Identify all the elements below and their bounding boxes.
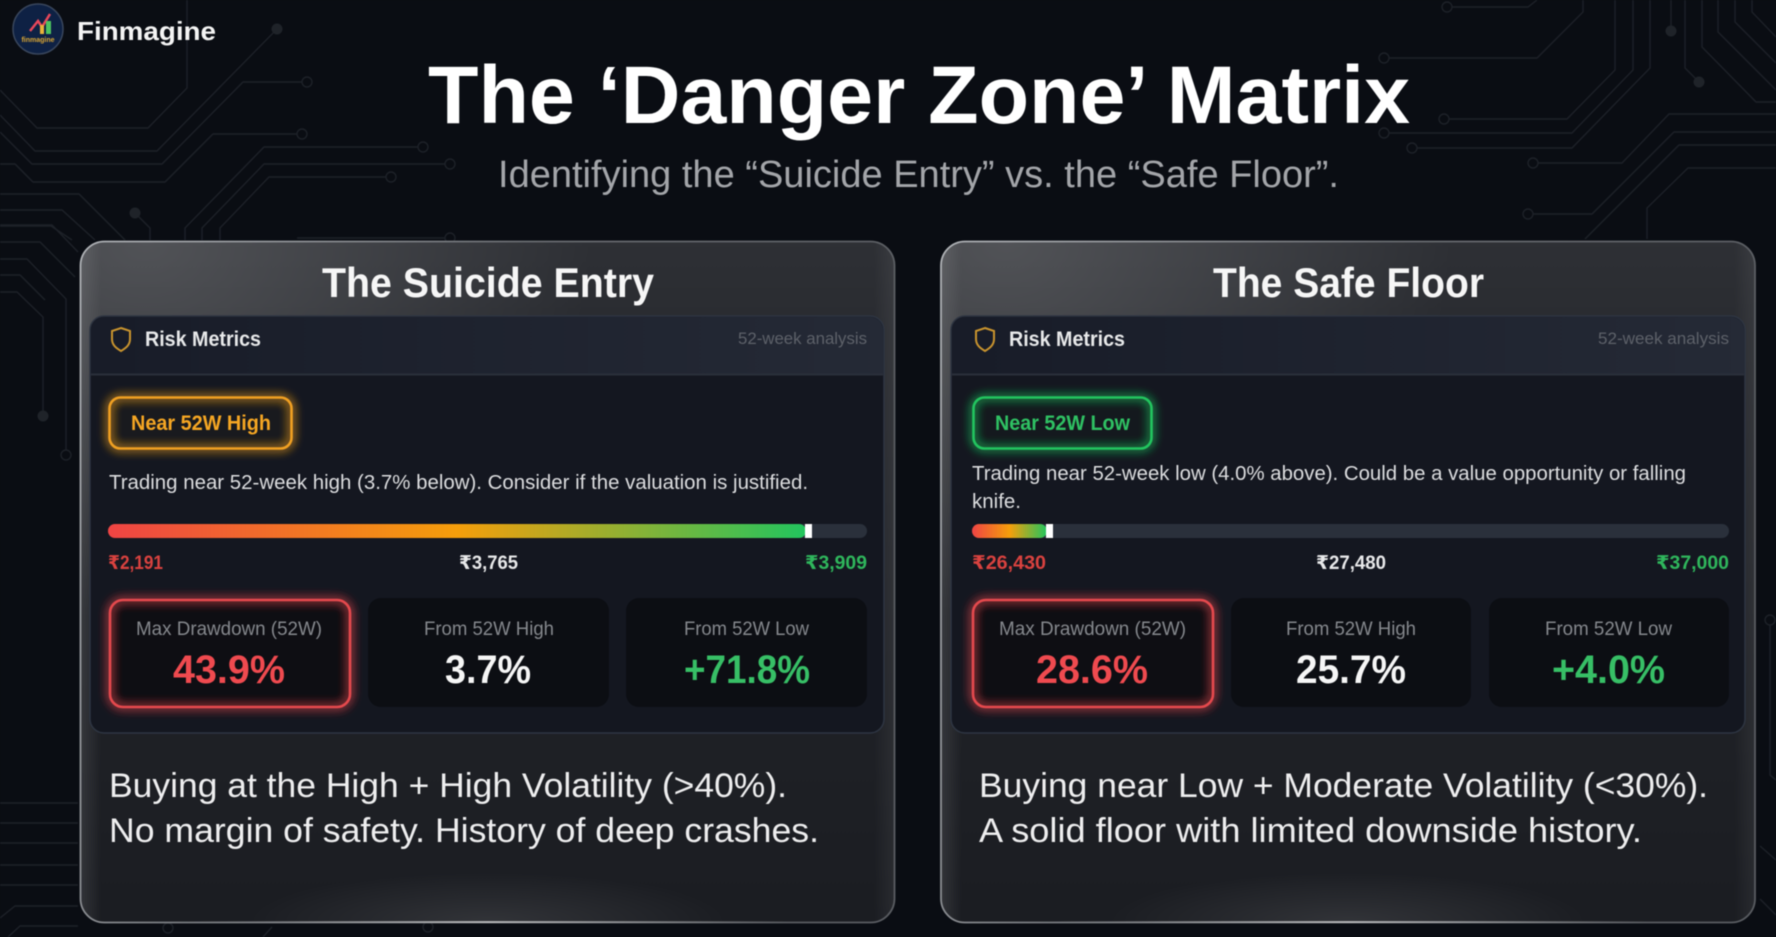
stat: from 52w low: +71.8% xyxy=(684,648,810,692)
risk metrics widget xyxy=(951,316,1745,733)
card heading: The Suicide Entry xyxy=(322,259,655,306)
stat: from 52w low: From 52W Low xyxy=(1545,619,1672,640)
subtitle: Identifying the “Suicide Entry” vs. the “Safe Floor”. xyxy=(498,154,1339,196)
stat: from 52w high: From 52W High xyxy=(1286,619,1416,640)
risk metrics widget xyxy=(90,316,884,733)
stat: from 52w low xyxy=(1489,598,1729,707)
stat: max drawdown: 28.6% xyxy=(1036,648,1148,692)
description xyxy=(972,463,1686,513)
title: The ‘Danger Zone’ Matrix xyxy=(428,50,1410,141)
card heading: The Safe Floor xyxy=(1213,259,1484,306)
stat: max drawdown: Max Drawdown (52W) xyxy=(999,619,1186,640)
takeaway text: A solid floor with limited downside history. xyxy=(979,812,1642,850)
period caption: 52-week analysis xyxy=(1598,329,1729,348)
stat: from 52w high: From 52W High xyxy=(424,619,554,640)
range labels: ₹37,000 xyxy=(1656,553,1729,574)
description: Trading near 52-week low (4.0% above). Could be a value opportunity or falling xyxy=(972,463,1686,485)
takeaway text: No margin of safety. History of deep crashes. xyxy=(109,812,819,850)
stat: from 52w high: 25.7% xyxy=(1296,648,1406,692)
range labels: ₹2,191 xyxy=(108,553,163,574)
icon: shield xyxy=(112,328,130,351)
stat: max drawdown: Max Drawdown (52W) xyxy=(136,619,322,640)
badge: near 52w high: Near 52W High xyxy=(131,412,271,435)
icon: finmagine logo: finmagine xyxy=(21,37,55,44)
range labels: ₹27,480 xyxy=(1316,553,1386,574)
stat: max drawdown xyxy=(110,600,350,707)
stat: max drawdown xyxy=(973,600,1213,707)
stat: from 52w high: 3.7% xyxy=(445,648,531,692)
panel: the suicide entry xyxy=(80,242,894,923)
takeaway text xyxy=(979,767,1708,850)
range labels xyxy=(972,553,1729,574)
widget background xyxy=(90,316,884,733)
stat: from 52w low xyxy=(626,598,867,707)
stat: from 52w low: From 52W Low xyxy=(684,619,809,640)
brand logo and name xyxy=(13,4,216,54)
icon: finmagine logo xyxy=(13,4,63,54)
period caption: 52-week analysis xyxy=(738,329,867,348)
takeaway text: Buying near Low + Moderate Volatility (<30%). xyxy=(979,767,1708,805)
card background xyxy=(941,242,1755,923)
card background xyxy=(80,242,894,923)
widget background xyxy=(951,316,1745,733)
stat: from 52w high xyxy=(368,598,609,707)
badge: near 52w high xyxy=(110,398,292,448)
description: Trading near 52-week high (3.7% below). Consider if the valuation is justified. xyxy=(109,472,808,494)
range bar xyxy=(108,524,867,538)
takeaway text xyxy=(109,767,819,850)
badge: near 52w low xyxy=(974,398,1152,448)
range labels: ₹3,909 xyxy=(805,553,867,574)
widget heading: Risk Metrics xyxy=(145,328,261,351)
brand name: Finmagine xyxy=(77,16,216,46)
icon: shield xyxy=(976,328,994,351)
stat: max drawdown: 43.9% xyxy=(173,648,285,692)
widget heading: Risk Metrics xyxy=(1009,328,1125,351)
badge: near 52w low: Near 52W Low xyxy=(995,412,1131,435)
range labels: ₹3,765 xyxy=(459,553,518,574)
range labels xyxy=(108,553,867,574)
panel: the safe floor xyxy=(941,242,1755,923)
range bar xyxy=(972,524,1729,538)
takeaway text: Buying at the High + High Volatility (>40%). xyxy=(109,767,787,805)
range labels: ₹26,430 xyxy=(972,553,1046,574)
stat: from 52w low: +4.0% xyxy=(1552,648,1665,692)
description: knife. xyxy=(972,491,1021,513)
stat: from 52w high xyxy=(1231,598,1471,707)
